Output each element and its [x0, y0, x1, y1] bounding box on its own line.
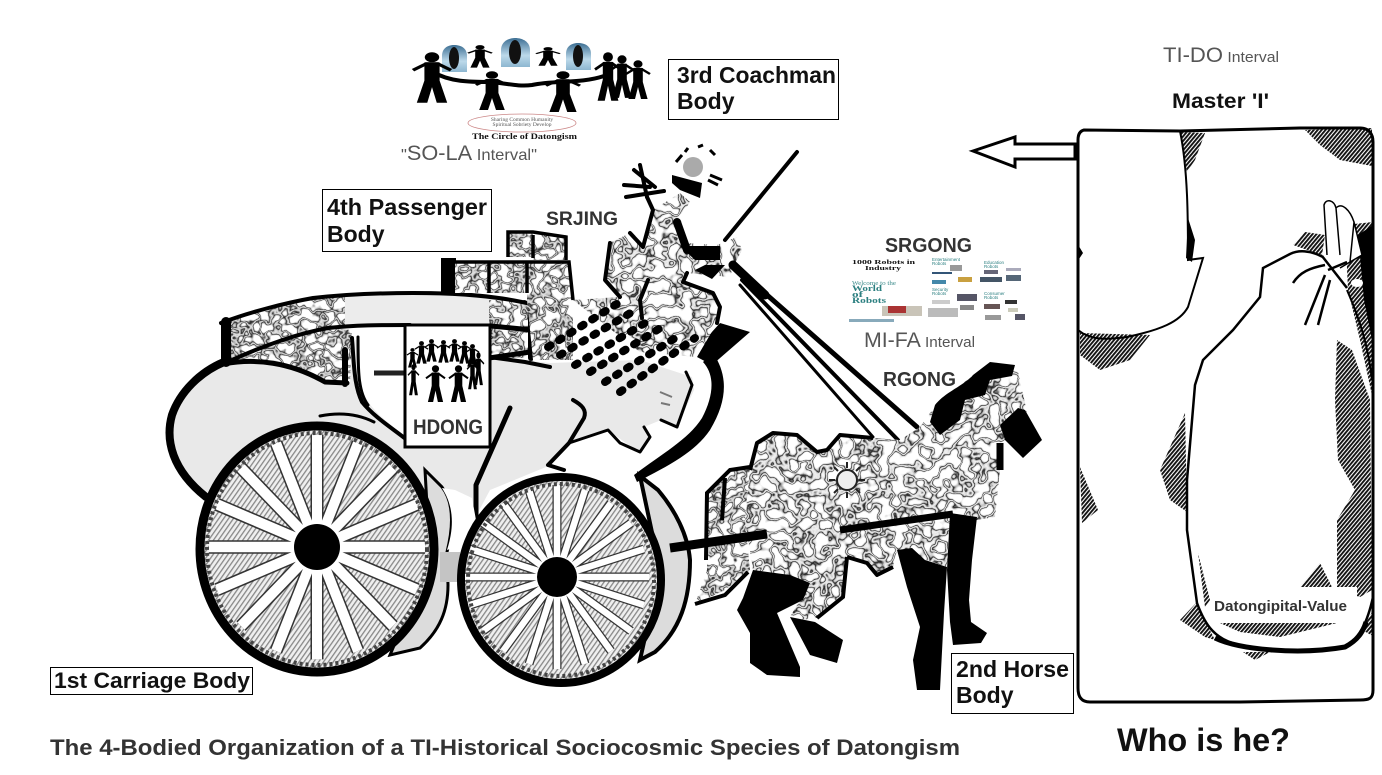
- label: SO-LA interval: "SO-LA Interval": [401, 142, 537, 165]
- roof texture right: [489, 300, 528, 358]
- hub: [294, 524, 340, 570]
- category labels: Robots: [984, 264, 999, 269]
- shaft rear: [670, 534, 767, 548]
- label: TI-DO interval: TI-DO Interval: [1163, 44, 1279, 67]
- whip: [725, 152, 797, 240]
- coachman figure: [570, 145, 797, 360]
- motto oval: [468, 114, 576, 132]
- label: SRGONG: SRGONG: [885, 235, 972, 257]
- head: [683, 157, 703, 177]
- neck strap: [996, 443, 1004, 470]
- circle of Datongism logo: [413, 38, 650, 141]
- solid shadows: [1077, 218, 1373, 345]
- shaft front: [840, 514, 953, 530]
- hatching shadows: [1080, 128, 1373, 660]
- label: RGONG: RGONG: [883, 369, 956, 391]
- question: Who is he?: [1117, 722, 1290, 758]
- category labels: Entertainment: [932, 257, 961, 262]
- panel frame: [405, 325, 490, 447]
- sack outline: [1187, 251, 1373, 650]
- sack base: [1215, 622, 1366, 651]
- spoke edges: [465, 485, 649, 669]
- rim: [200, 426, 434, 672]
- passenger panel: [405, 325, 490, 447]
- box: 4th Passenger Body: 4th Passenger: [327, 194, 487, 220]
- linked arms: [433, 72, 604, 86]
- hind thigh line: [817, 557, 847, 618]
- box: 2nd Horse Body: 2nd Horse: [956, 656, 1069, 682]
- category labels: Education: [984, 260, 1005, 265]
- thumbnails: [849, 265, 1025, 322]
- body fill: [166, 340, 694, 520]
- arch figures: [449, 40, 583, 69]
- horse outline: [750, 433, 893, 575]
- horse texture: [745, 362, 1027, 620]
- category labels: Consumer: [984, 291, 1005, 296]
- carriage outlines: [170, 293, 692, 525]
- label: MI-FA interval: MI-FA Interval: [864, 329, 975, 352]
- robots collage: [849, 257, 1025, 322]
- black collar: [697, 323, 750, 365]
- value label: [1212, 587, 1357, 623]
- white gap: [442, 488, 476, 550]
- coachman arm: [680, 246, 725, 279]
- box: 4th Passenger Body: [322, 190, 492, 252]
- rim: [461, 477, 661, 683]
- hub: [537, 557, 577, 597]
- luggage shadow: [441, 258, 456, 293]
- inner ring: [468, 484, 654, 676]
- sleeve line: [1078, 131, 1203, 339]
- front wheel: [461, 477, 661, 683]
- rear leg near: [737, 570, 810, 677]
- door handle: [374, 370, 405, 376]
- luggage outlines: [455, 232, 573, 300]
- hair swoop: [634, 353, 724, 482]
- category labels: Robots: [932, 291, 947, 296]
- motto: Sharing Common Humanity: [491, 117, 553, 123]
- tail outline: [695, 467, 750, 604]
- box: 2nd Horse Body: Body: [956, 682, 1014, 708]
- coachman outlines: [605, 152, 797, 323]
- box: 2nd Horse Body: [952, 654, 1074, 714]
- portrait arch center: [501, 38, 530, 67]
- muzzle: [1000, 408, 1042, 458]
- motto line two: Spiritual Sobriety Develop: [493, 122, 552, 128]
- portrait arch left: [442, 45, 467, 72]
- spoke edges: [209, 435, 425, 659]
- category labels: Security: [932, 287, 949, 292]
- rear fender: [390, 470, 452, 655]
- mane: [930, 362, 1015, 435]
- rear wheel: [200, 426, 434, 672]
- box: 3rd Coachman Body: 3rd Coachman: [677, 62, 836, 88]
- coachman texture: [570, 190, 745, 360]
- box: 4th Passenger Body: Body: [327, 221, 385, 247]
- door: [360, 329, 405, 437]
- sun emblem: [829, 462, 865, 498]
- box: 3rd Coachman Body: [668, 60, 838, 120]
- category labels: Robots: [932, 261, 947, 266]
- rear leg far: [790, 617, 843, 663]
- world of robots: [852, 284, 886, 305]
- front leg near: [947, 513, 987, 645]
- raised hand: [624, 165, 664, 197]
- sack right edge: [1347, 290, 1372, 380]
- roof texture left: [231, 297, 352, 384]
- label: SRJING: SRJING: [546, 209, 618, 230]
- category labels: [932, 257, 1005, 300]
- title: The 4-Bodied Organization of a TI-Historical Sociocosmic Species of Datongism: [50, 735, 960, 760]
- panel label: HDONG: [413, 416, 483, 439]
- value label: Datongipital-Value: [1214, 599, 1347, 615]
- sack tie ears: [1324, 201, 1362, 268]
- inner ring: [207, 433, 427, 665]
- headline industry: Industry: [865, 265, 902, 272]
- logo caption: The Circle of Datongism: [472, 132, 577, 141]
- horse: [670, 355, 1042, 690]
- carriage body: [166, 290, 750, 525]
- hair: [548, 302, 695, 392]
- visor: [672, 175, 702, 198]
- portrait arch right: [566, 43, 591, 70]
- roof band: [221, 293, 535, 360]
- world of robots: World: [852, 284, 883, 293]
- panel: master with bag: [1077, 128, 1373, 702]
- sack knot: [1293, 256, 1347, 325]
- tail: [696, 469, 750, 601]
- headline: 1000 Robots in: [852, 259, 916, 266]
- front leg far: [897, 548, 947, 690]
- fenders: [390, 470, 690, 660]
- category labels: Robots: [984, 295, 999, 300]
- hole in sack: [1351, 279, 1363, 287]
- label: Master I: Master 'I': [1172, 90, 1269, 113]
- luggage texture: [455, 234, 573, 360]
- luggage: [441, 228, 575, 363]
- halo rays: [676, 145, 722, 185]
- arrow: master to carriage: [973, 137, 1075, 167]
- figures: [413, 45, 650, 112]
- welcome: Welcome to the: [852, 281, 896, 287]
- reins: [733, 265, 917, 440]
- coupling: [440, 552, 460, 582]
- world of robots: Robots: [852, 296, 886, 305]
- box: 1st Carriage Body: 1st Carriage Body: [54, 668, 250, 693]
- world of robots: of: [852, 290, 864, 299]
- people circle: [407, 339, 484, 402]
- box: 3rd Coachman Body: Body: [677, 88, 735, 114]
- panel outline: [1078, 128, 1373, 702]
- face detail: [660, 392, 672, 405]
- front fender: [640, 476, 690, 660]
